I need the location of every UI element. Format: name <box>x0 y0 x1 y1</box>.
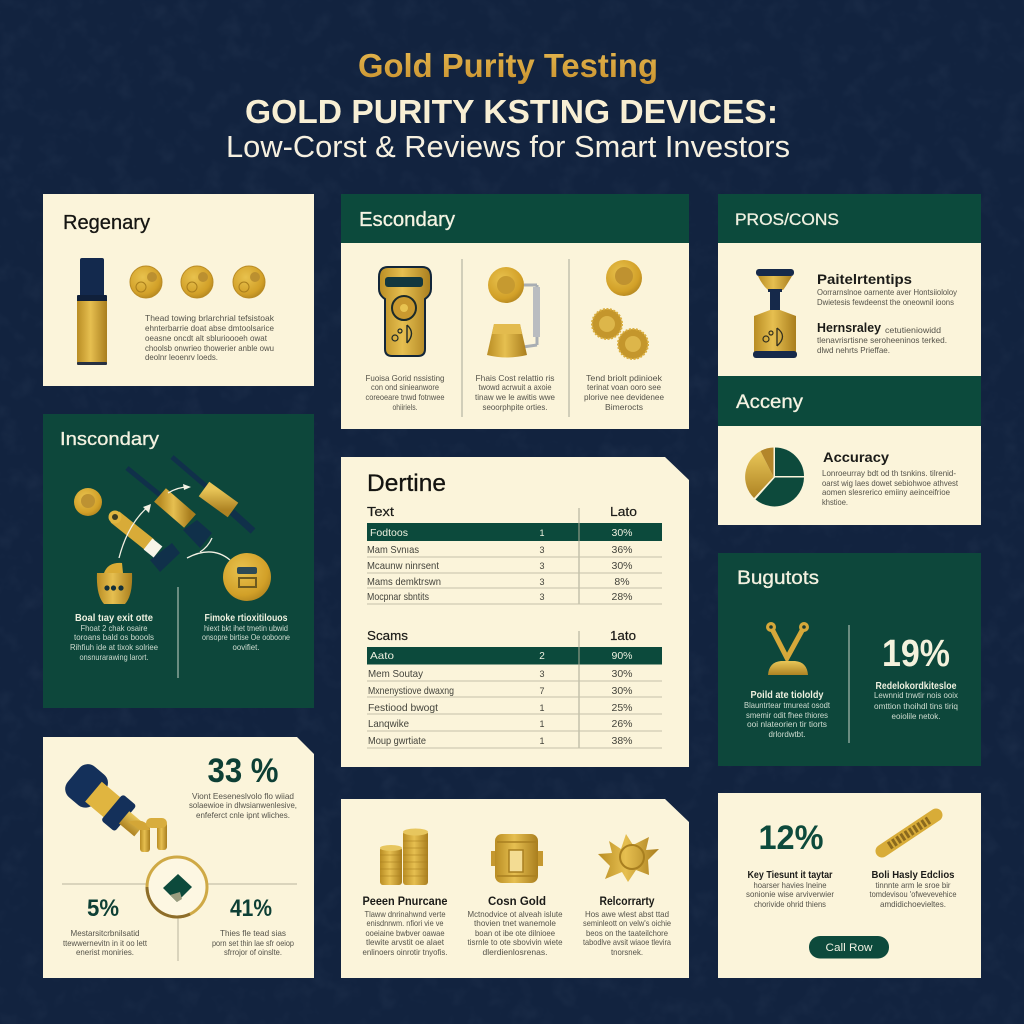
stat: 41 percent <box>212 895 294 957</box>
column two: boan ot ibe ote dilnioee <box>475 928 555 938</box>
cons text: tlenavrisrtisne seroheeninos terked. <box>817 335 947 345</box>
button: Call Row <box>826 942 873 954</box>
column two: dlerdienlosrenas. <box>482 947 548 957</box>
heading: Escondary <box>359 209 455 231</box>
text column one: Boal tıay exit otte <box>75 613 153 624</box>
text column one: toroans bald os boools <box>74 632 154 642</box>
column three: beos on the taateilchore <box>586 928 668 938</box>
table one: 3 <box>539 545 545 555</box>
column one: ooeiaine bwbver oawae <box>366 928 445 938</box>
table two: Scams <box>367 628 409 643</box>
accuracy text: Lonroeurray bdt od th tsnkins. tilrenid- <box>822 468 956 478</box>
table one: Fodtoos <box>370 527 408 539</box>
stat: 19 percent: eoiolile netok. <box>892 711 940 721</box>
text column one: ohiiriels. <box>392 402 418 412</box>
description: choolsb onwrieo thowerier anble owu <box>145 343 274 353</box>
illustration: probe tool <box>61 760 167 852</box>
header band <box>341 194 689 243</box>
table one <box>367 504 662 604</box>
text column two: seoorphpite orties. <box>482 402 548 412</box>
table two: Lanqwike <box>368 718 409 730</box>
column two: tisrnle to ote sbovivin wiete <box>468 937 563 947</box>
table one: 3 <box>539 577 545 587</box>
description: oeasne oncdt alt sblurioooeh owat <box>145 333 268 343</box>
text column two: twowd acrwuit a axoie <box>478 382 552 392</box>
heading: Dertine <box>367 470 446 497</box>
icon: gold ring block <box>491 834 543 883</box>
text column one <box>366 373 445 412</box>
text column two <box>202 613 290 652</box>
table two: Moup gwrtiate <box>368 735 426 747</box>
stat: 12 percent: 12% <box>758 819 824 857</box>
table one: Text <box>367 504 394 519</box>
panel: call to action <box>718 793 981 978</box>
text column one: coreoeare tnwd fotnwee <box>366 392 445 402</box>
accuracy text: khstioe. <box>822 497 848 507</box>
description: deolnr leoenrv loeds. <box>145 352 218 362</box>
stat: 33 percent: 33 % <box>208 752 278 790</box>
table one: 1 <box>539 528 545 538</box>
key takeaway text: chorivide ohrid thiens <box>754 899 826 909</box>
main heading: GOLD PURITY KSTING DEVICES: <box>245 93 778 130</box>
heading: PROS/CONS <box>735 210 839 229</box>
table one: 28% <box>611 591 633 603</box>
stat: 41 percent: porn set thin lae sfr oeiop <box>212 938 294 948</box>
text column two: oovifiet. <box>232 642 260 652</box>
text column two: hiext bkt ihet tmetin ubwid <box>204 623 288 633</box>
text column one: con ond sinieanwore <box>371 382 439 392</box>
icon: coin and gold bar <box>487 267 540 358</box>
stat: 19 percent: 19% <box>882 633 950 675</box>
accuracy text: aomen slesrerico emiiny aeinceifrioe <box>822 487 950 497</box>
text column: Poild ate tiololdy <box>750 690 824 701</box>
table one: Mcaunw ninrsent <box>367 560 439 572</box>
divider <box>177 587 179 678</box>
icon: coins <box>130 266 265 298</box>
stat: 41 percent: sfrrojor of oinslte. <box>224 947 282 957</box>
text column one: onsnurarawing larort. <box>80 652 148 662</box>
icon: tester bottle <box>77 258 107 365</box>
gold notes text: tomdevisou 'ofwevevehice <box>870 889 957 899</box>
gold notes text <box>870 869 957 909</box>
eyebrow title: Gold Purity Testing <box>358 47 658 84</box>
heading: Regenary <box>63 212 150 234</box>
column one <box>362 894 448 957</box>
text column two <box>475 373 555 412</box>
panel: pros and cons <box>718 194 981 376</box>
text column three: Tend briolt pdinioek <box>586 373 663 383</box>
gold notes text: tinnnte arm le sroe bir <box>876 880 951 890</box>
text column three: Bimerocts <box>605 402 643 412</box>
table two: 38% <box>611 735 633 747</box>
table one: 3 <box>539 561 545 571</box>
table two: 90% <box>611 650 633 662</box>
key takeaway text <box>746 869 834 909</box>
stat: 33 percent: Viont Eeseneslvolo flo wiiad <box>192 791 294 801</box>
panel: dertine table <box>341 457 689 767</box>
text column three: plorive nee devidenee <box>584 392 664 402</box>
text column two: Fimoke rtioxitilouos <box>204 613 288 624</box>
column one: tlewite arvstit oe alaet <box>366 937 445 947</box>
table two: 30% <box>611 685 633 697</box>
panel: bugutots <box>718 553 981 766</box>
icon: coin stacks <box>380 828 428 885</box>
pros text: Oorrarnslnoe oarnente aver Hontsiiololoy <box>817 287 958 297</box>
column one: Peeen Pnurcane <box>362 894 448 908</box>
accuracy text: oarst wig laes dowet sebiohwoe athvest <box>822 478 959 488</box>
table one: 3 <box>539 592 545 602</box>
text column one: Fhoat 2 chak osaire <box>80 623 148 633</box>
text column three <box>584 373 664 412</box>
stat: 5 percent: Mestarsitcrbnilsatid <box>70 928 140 938</box>
text column: drlordwtbt. <box>768 729 806 739</box>
text column two: tinaw we le awitis wwe <box>475 392 555 402</box>
key takeaway text: sonionie wise arviverwier <box>746 889 834 899</box>
column three: Relcorrarty <box>600 894 655 908</box>
cons text: dlwd nehrts Prieffae. <box>817 345 890 355</box>
stat: 33 percent: solaewioe in dlwsianwenlesive, <box>189 800 297 810</box>
column three <box>583 894 671 957</box>
stat: 33 percent <box>189 752 297 820</box>
panel: escondary <box>341 194 689 429</box>
table two: Mxnenystiove dwaxng <box>368 685 454 697</box>
text column: ooi nlateorien tir tiorts <box>747 719 827 729</box>
column two: thovien tnet wanemole <box>474 918 556 928</box>
table one: 30% <box>611 560 633 572</box>
icon: gold tongs <box>766 622 809 675</box>
table two: 3 <box>539 669 545 679</box>
panel: gold products <box>341 799 689 978</box>
description <box>145 313 275 362</box>
table one: Mam Svnıas <box>367 544 419 556</box>
text column <box>744 690 831 739</box>
accuracy text <box>822 449 959 507</box>
column one: Tlaww dnrinahwnd verte <box>364 909 446 919</box>
table one: Lato <box>610 504 637 519</box>
stat: 19 percent <box>874 633 959 721</box>
column two: Cosn Gold <box>488 894 546 908</box>
gold notes text: amdidichoevieltes. <box>880 899 946 909</box>
text column two: Fhais Cost relattio ris <box>476 373 554 383</box>
table two: 1 <box>539 703 545 713</box>
table two: Mem Soutay <box>368 668 424 680</box>
column three: tnorsnek. <box>611 947 643 957</box>
panel: accuracy <box>718 376 981 525</box>
table two: 30% <box>611 668 633 680</box>
icon: bench tester <box>753 269 797 358</box>
table two: Aato <box>370 650 394 662</box>
icon: handheld tester <box>379 267 431 356</box>
stat: 5 percent: enerist moniries. <box>76 947 134 957</box>
subtitle: Low-Corst & Reviews for Smart Investors <box>226 129 790 164</box>
table two <box>367 628 662 748</box>
text column: smemir odit fhee thiores <box>746 710 828 720</box>
divider <box>848 625 850 743</box>
icon: gold ring with diamond <box>147 857 207 917</box>
icon: gold bar <box>882 815 936 851</box>
text column: Blauntrtear tmureat osodt <box>744 700 831 710</box>
table two: 7 <box>539 686 545 696</box>
table one: 30% <box>611 527 633 539</box>
stat: 19 percent: omttion thoihdl tins tiriq <box>874 701 958 711</box>
table one: 8% <box>614 576 630 588</box>
pros text: Dwietesis fewdeenst the oneownil ioons <box>817 297 954 307</box>
text column one: Fuoisa Gorid nssisting <box>366 373 445 383</box>
text column one: Rihfiuh ide at tixok solriee <box>70 642 158 652</box>
accuracy text: Accuracy <box>823 449 889 465</box>
panel: inscondary <box>43 414 314 708</box>
pie chart <box>745 447 804 506</box>
panel: regenary <box>43 194 314 386</box>
illustration: testing process <box>74 457 271 604</box>
table two: 1 <box>539 736 545 746</box>
heading: Bugutots <box>737 568 819 589</box>
column three: seminleott on velw's oichie <box>583 918 671 928</box>
text column two: onsopre birtise Oe ooboone <box>202 632 290 642</box>
button <box>809 936 889 958</box>
header band <box>718 376 981 426</box>
title block <box>226 47 790 164</box>
table two: 1ato <box>610 628 636 643</box>
column two: Mctnodvice ot alveah islute <box>468 909 563 919</box>
heading: Inscondary <box>60 428 160 449</box>
icon: coin and gears <box>592 260 648 359</box>
stat: 5 percent <box>63 895 148 957</box>
description: Thead towing brlarchrial tefsistoak <box>145 313 275 323</box>
stat: 5 percent: ttewwernevitn in it oo lett <box>63 938 148 948</box>
column one: enisdnrwm. nfiori vie ve <box>366 918 444 928</box>
stat: 5 percent: 5% <box>87 895 119 922</box>
key takeaway text: hoarser havies lneine <box>754 880 827 890</box>
stat: 33 percent: enfeferct cnle ipnt wliches. <box>196 810 290 820</box>
column two <box>468 894 563 957</box>
stat: 19 percent: Redelokordkitesloe <box>876 681 957 692</box>
table one: Mocpnar sbntits <box>367 591 429 603</box>
table one: 36% <box>611 544 633 556</box>
cons text: Hernsraley <box>817 320 882 335</box>
table one: Mams demktrswn <box>367 576 441 588</box>
table two: 2 <box>539 651 545 662</box>
text column three: terinat voan ooro see <box>587 382 661 392</box>
table two: 1 <box>539 719 545 729</box>
description: ehnterbarrie doat abse dmtoolsarice <box>145 323 274 333</box>
column three: Hos awe wlest abst ttad <box>585 909 669 919</box>
icon: gold star seal <box>598 834 659 882</box>
column three: tabodlve avsit wiaoe tlevira <box>583 937 671 947</box>
cons text: cetutieniowidd <box>885 325 941 335</box>
column one: enlinoers oinrotir tnyofis. <box>362 947 448 957</box>
cons text <box>817 320 947 355</box>
header band <box>718 194 981 243</box>
stat: 41 percent: Thies fle tead sias <box>220 928 286 938</box>
stat: 19 percent: Lewnnid tnwtir nois ooix <box>874 690 959 700</box>
gold notes text: Boli Hasly Edclios <box>872 869 955 881</box>
stat: 41 percent: 41% <box>230 895 272 922</box>
key takeaway text: Key Tiesunt it taytar <box>748 869 832 881</box>
table two: 25% <box>611 702 633 714</box>
text column one <box>70 613 158 662</box>
table two: 26% <box>611 718 633 730</box>
pros text <box>817 271 958 307</box>
heading: Acceny <box>736 392 804 413</box>
pros text: Paitelrtentips <box>817 271 912 287</box>
panel: stats left <box>43 737 314 978</box>
table two: Festiood bwogt <box>368 702 438 714</box>
